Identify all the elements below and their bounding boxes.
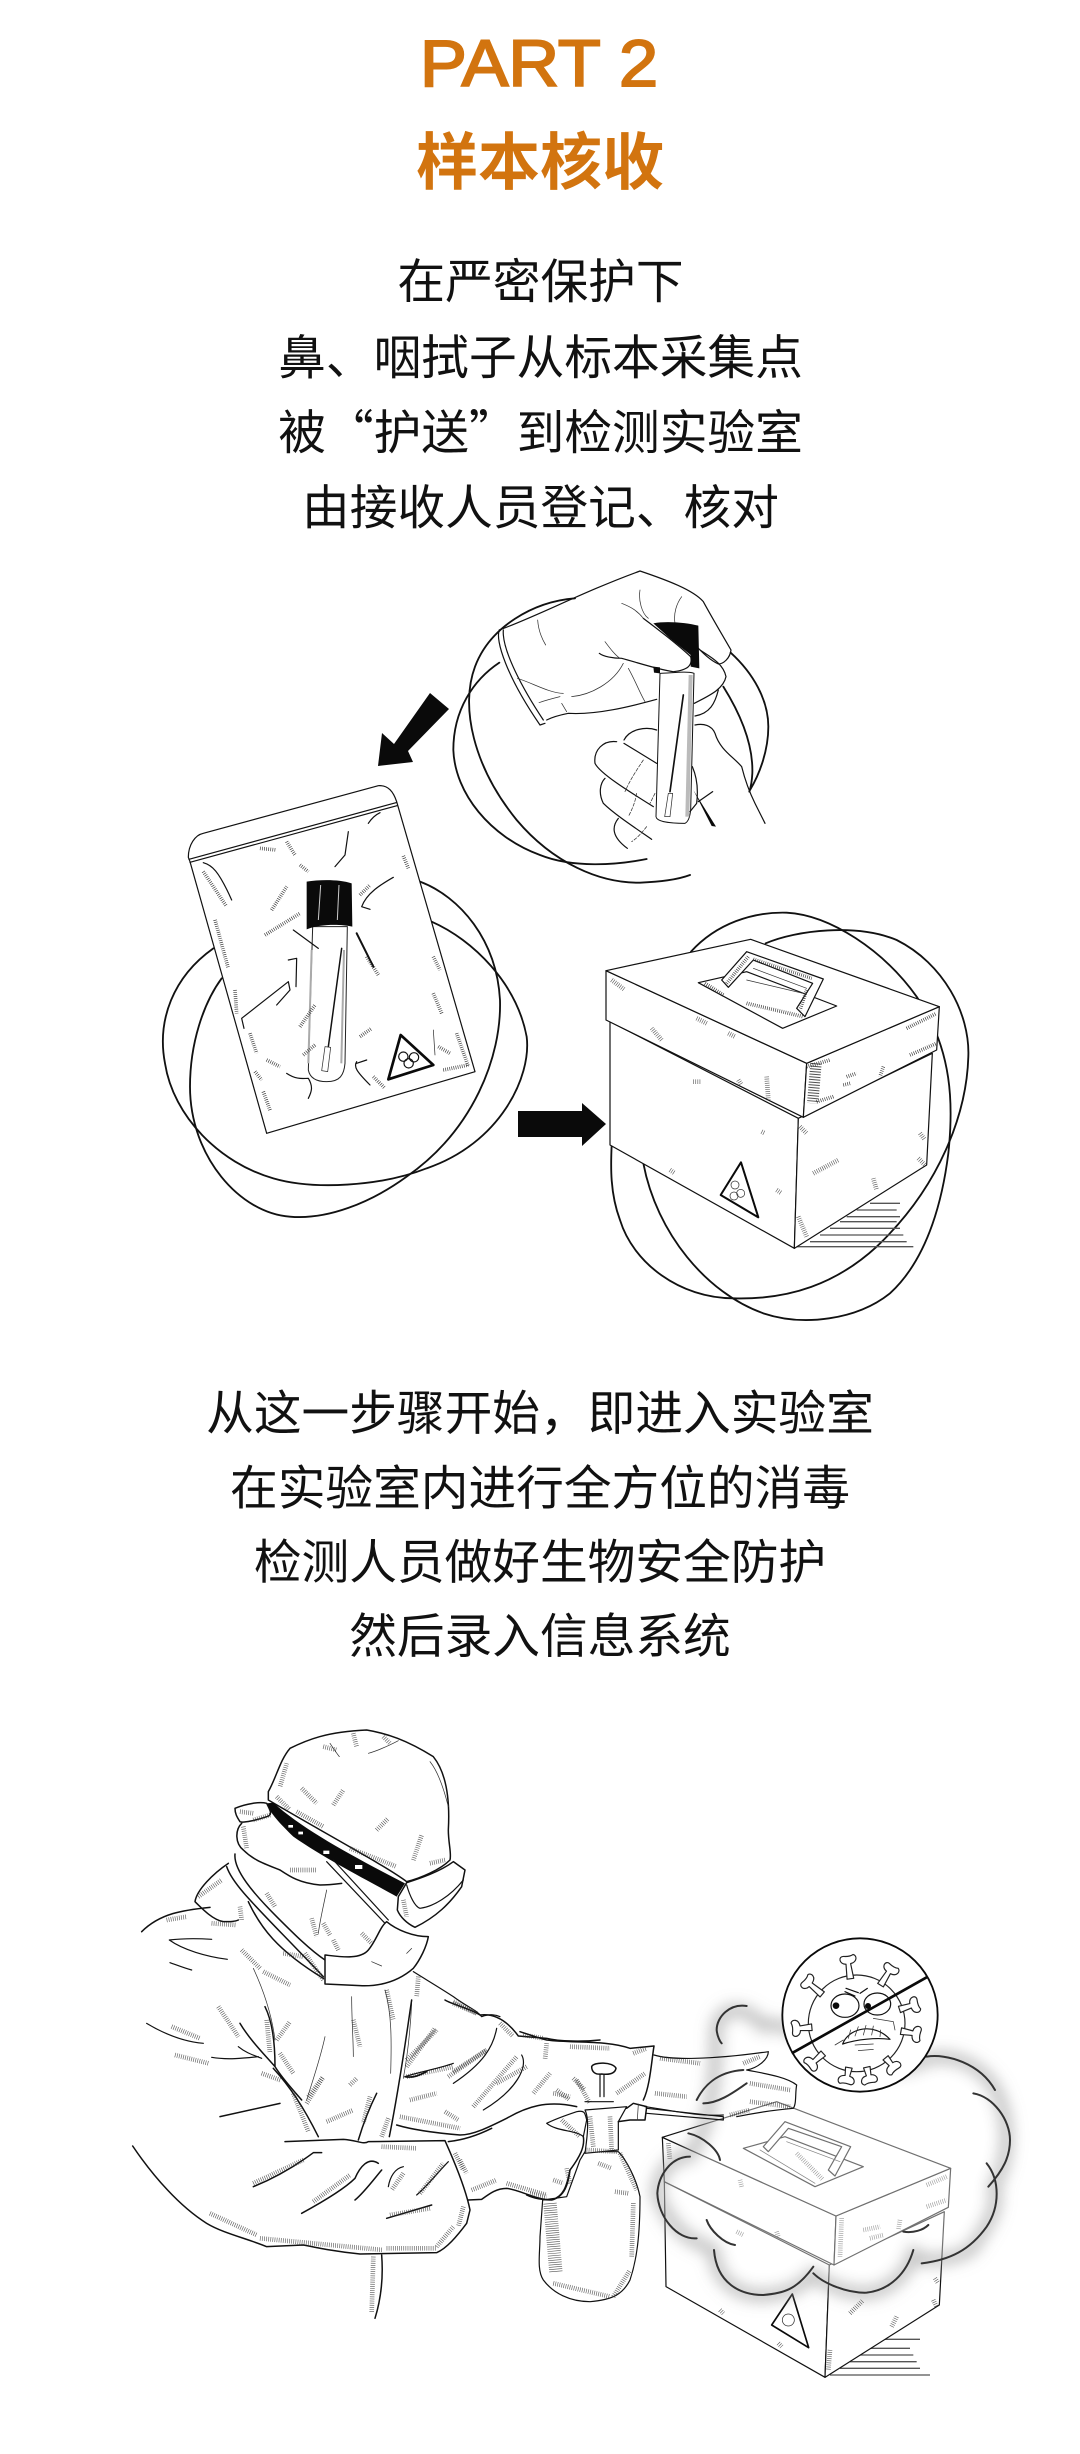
surgical mask <box>325 1922 428 1986</box>
text block: second paragraph: 在实验室内进行全方位的消毒 <box>230 1450 850 1519</box>
text block: second paragraph: 从这一步骤开始，即进入实验室 <box>206 1375 874 1444</box>
arrow: hand to bag <box>378 693 449 766</box>
text block: intro paragraph: 由接收人员登记、核对 <box>302 470 779 538</box>
heading: 样本核收: 样本核收 <box>416 112 664 202</box>
icon: crossed-out virus <box>782 1938 938 2092</box>
second box <box>662 2102 951 2377</box>
spray bottle <box>527 2063 723 2302</box>
illustration: technician body and folded arm <box>133 2000 600 2318</box>
icon: biohazard triangle on box <box>721 1162 758 1217</box>
illustration: disinfected box, mist cloud, spray bottle and virus <box>520 1938 1010 2377</box>
icon: biohazard triangle on bag <box>388 1035 433 1079</box>
illustration: sealed biohazard sample bag <box>163 786 527 1217</box>
text block: intro paragraph <box>278 244 803 538</box>
disinfectant mist <box>657 2006 1010 2295</box>
text block: intro paragraph: 被“护送”到检测实验室 <box>278 394 803 464</box>
text block: intro paragraph: 在严密保护下 <box>397 244 684 312</box>
lower gown <box>375 2255 382 2318</box>
illustration: gloved hands holding sample tube <box>453 571 768 883</box>
illustration: technician head and upper torso in protective suit <box>142 1730 500 2100</box>
text block: second paragraph: 然后录入信息系统 <box>349 1598 731 1667</box>
right glove and sleeve end <box>520 2032 797 2117</box>
goggles band <box>267 1803 405 1897</box>
box handle <box>698 952 837 1028</box>
title: PART 2: PART 2 <box>420 26 658 100</box>
text block: second paragraph <box>206 1375 874 1667</box>
left glove fist <box>460 2160 570 2200</box>
gown front and right sleeve <box>397 2000 600 2142</box>
protective cap <box>268 1730 450 1882</box>
illustration: biohazard transport box <box>606 913 968 1320</box>
arrow: bag to box <box>518 1103 606 1146</box>
text block: second paragraph: 检测人员做好生物安全防护 <box>254 1524 826 1593</box>
text block: intro paragraph: 鼻、咽拭子从标本采集点 <box>278 320 803 388</box>
